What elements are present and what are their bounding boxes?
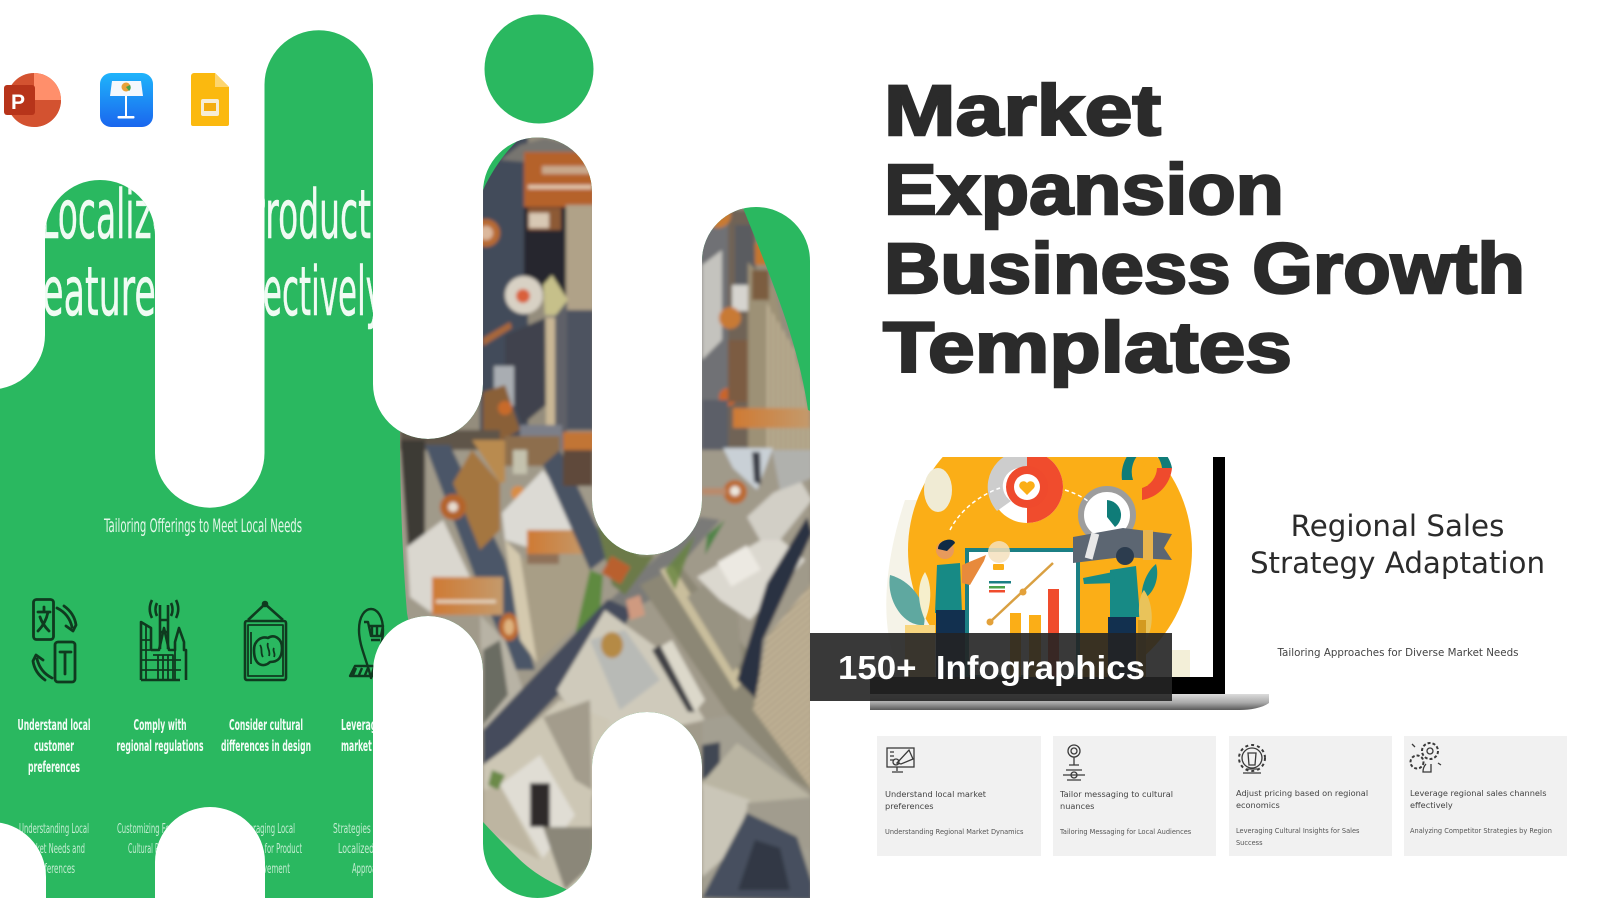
column: comply with regional regulations [116,716,204,755]
card: adjust pricing: Leveraging Cultural Insights for Sales [1236,827,1360,835]
card: adjust pricing [1229,736,1392,856]
upper column [480,130,528,440]
wide road [640,565,810,790]
icon: monitor megaphone [887,748,914,772]
card: tailor messaging [1053,736,1216,856]
text: Effectively [222,253,384,332]
heading: regional sales strategy adaptation: Strategy Adaptation [1250,546,1545,580]
text: regional regulations [116,737,204,755]
centre [557,610,705,745]
column descriptions: Improvement [242,862,290,877]
laptop base [870,694,1269,710]
laptop bezel [870,457,1225,694]
icon: Keynote [100,73,153,127]
text: left panel heading: Features [24,253,174,332]
text: left panel heading: Localize [40,176,172,255]
column: comply with regional regulations: Comply with [134,716,186,734]
roads [425,445,535,670]
icon: bulb with gears [1410,743,1441,772]
column: understand local customer preferences: preferences [28,758,80,776]
card: tailor messaging: nuances [1060,801,1094,811]
heading: regional sales strategy adaptation: Regional Sales [1291,509,1504,543]
lower right column [702,715,812,900]
screen artwork [886,457,1192,677]
panel: green wave shape [0,30,810,898]
column: understand local customer preferences: customer [34,737,74,755]
mid band base [395,450,810,800]
banner: 150+ Infographics: 150+ Infographics [838,649,1145,686]
lower left column [483,699,598,890]
icon: city tower [141,600,186,680]
icon: shopping location pin [350,609,385,678]
banner: 150+ Infographics [810,633,1172,701]
card: understand local market preferences: Understanding Regional Market Dynamics [885,828,1024,836]
card: leverage sales channels [1404,736,1567,856]
icon: translate [33,600,76,682]
column descriptions: Strategies for Market [333,822,411,837]
icon: bulb network [1063,745,1085,780]
icon: framed map [245,602,286,680]
title [883,72,1525,388]
card: understand local market preferences: preferences [885,801,934,811]
laptop illustration [870,457,1269,710]
upper right column [702,224,730,449]
title: Market [884,72,1161,151]
icon: green circle [484,14,594,124]
icon: Google Slides [191,73,229,126]
card: tailor messaging: Tailor messaging to cultural [1059,789,1173,799]
column descriptions [20,823,373,876]
card: understand local market preferences: Understand local market [885,789,987,799]
column: understand local customer preferences [18,716,90,776]
column descriptions: Market Needs and [23,842,85,857]
column descriptions: Understanding Local [19,822,89,837]
column descriptions: Approaches [352,862,392,877]
text: left panel subtitle: Tailoring Offerings to Meet Local Needs [103,515,302,537]
column descriptions: Preferences [33,862,75,877]
column descriptions: Customizing Features for [117,822,203,837]
title: Expansion [884,151,1284,230]
text: Understand local [18,716,90,734]
title: Templates [883,309,1292,388]
column: leverage local market insights: Leverage local [341,716,405,734]
text: market insights [341,737,409,755]
icon: PowerPoint [4,73,61,127]
card: leverage sales channels: Analyzing Competitor Strategies by Region [1410,827,1552,835]
card: adjust pricing: Success [1236,839,1263,847]
card: adjust pricing: Adjust pricing based on regional [1236,788,1368,798]
title: Business Growth [884,230,1525,309]
column descriptions: Localized Product [338,842,406,857]
column descriptions: Cultural Preferences [128,842,192,857]
card: leverage sales channels: effectively [1410,800,1453,810]
column: consider cultural differences in design [221,716,311,755]
card: leverage sales channels: Leverage regional sales channels [1410,788,1546,798]
column: consider cultural differences in design: Consider cultural [229,716,303,734]
icon: PowerPoint: P [11,91,25,114]
picture: aerial city with orange markers [395,125,815,900]
icon: gear chess piece [1239,745,1265,773]
heading: regional sales strategy adaptation [1250,509,1545,580]
card: understand local market preferences [877,736,1041,856]
text: tailoring approaches: Tailoring Approaches for Diverse Market Needs [1276,647,1519,659]
column descriptions: Feedback for Product [230,842,302,857]
card: adjust pricing: economics [1236,800,1280,810]
column: leverage local market insights [342,719,373,751]
text: left panel heading [45,186,373,330]
text: differences in design [221,737,311,755]
text: left panel heading: Product [246,176,371,255]
column descriptions: Leveraging Local [237,822,295,837]
card: tailor messaging: Tailoring Messaging for Local Audiences [1059,828,1192,836]
